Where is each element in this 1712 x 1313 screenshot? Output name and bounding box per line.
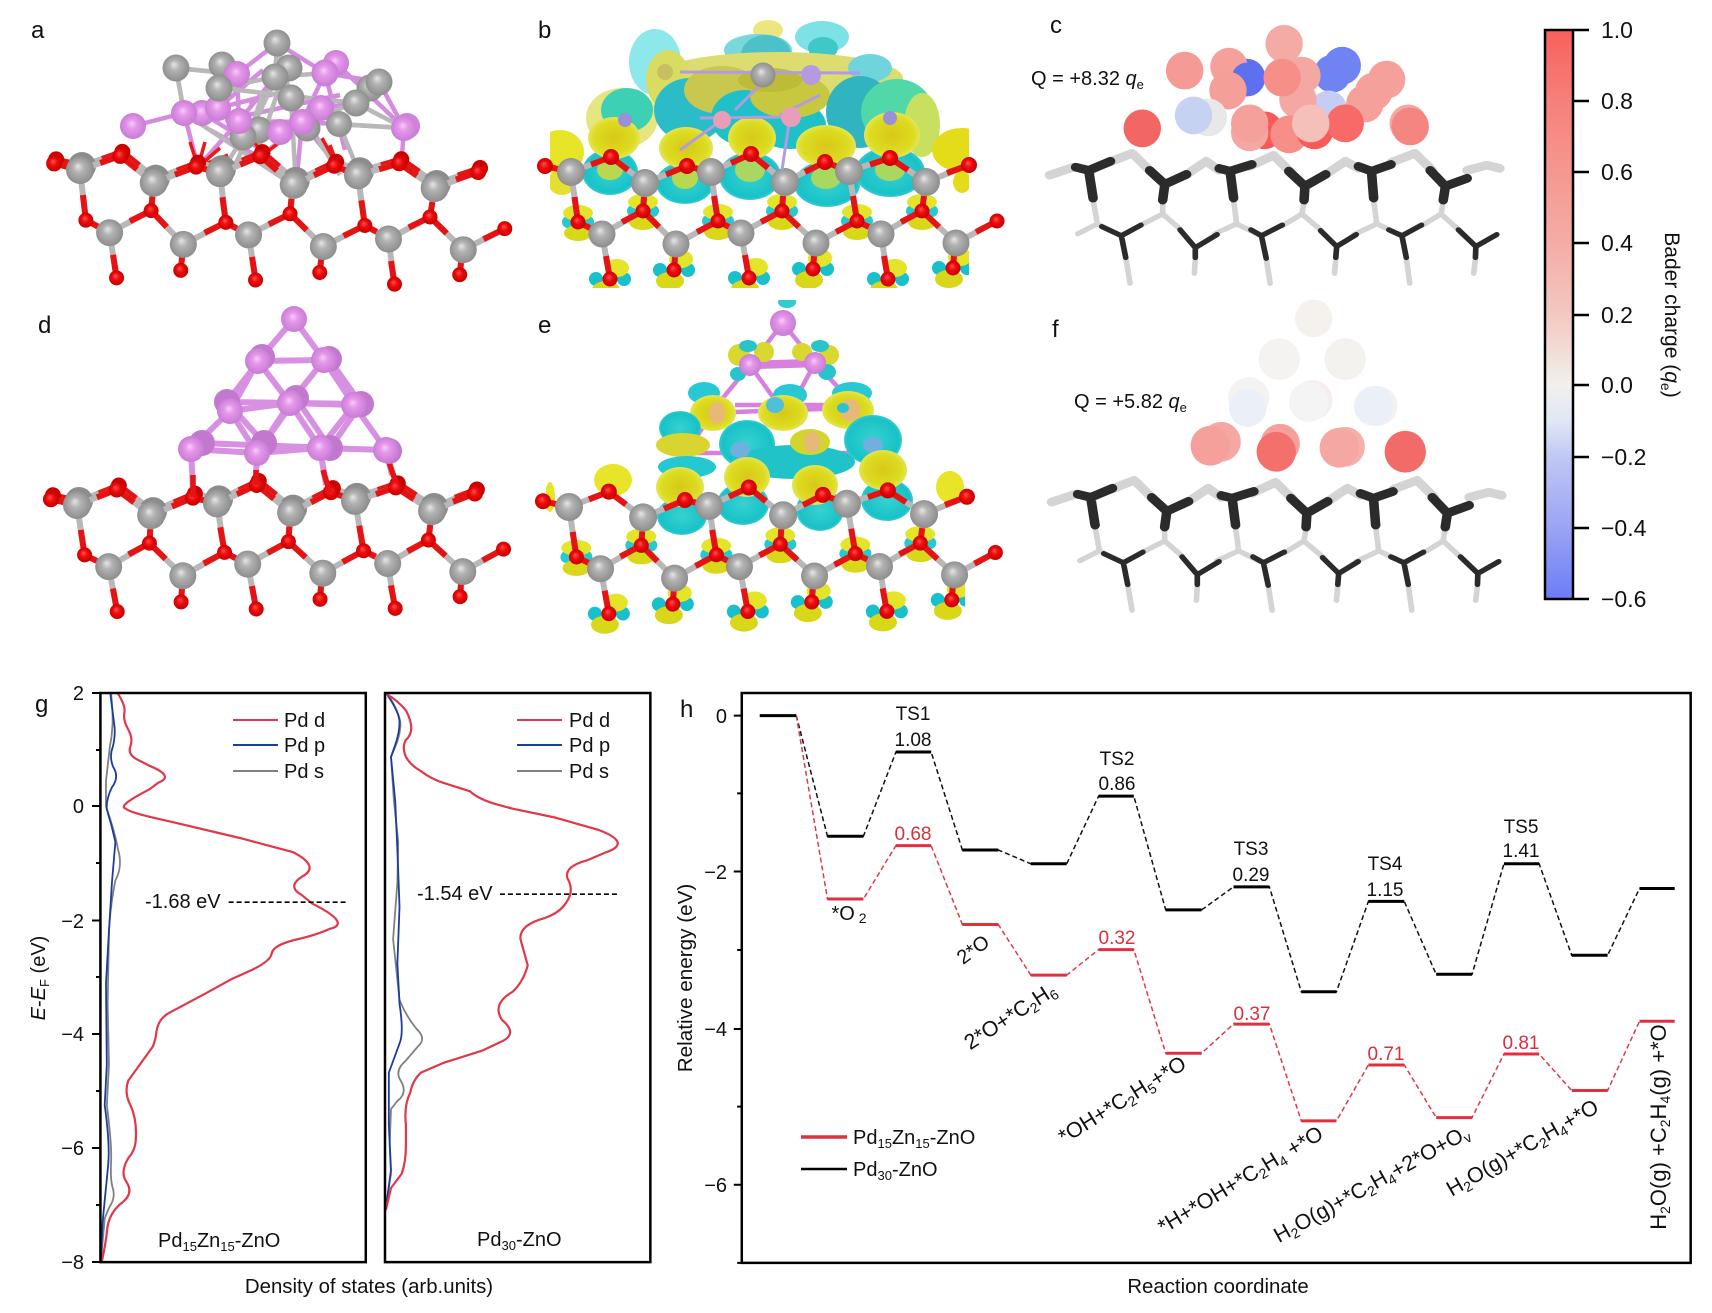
legend left: Pd p xyxy=(284,735,325,757)
label f: f xyxy=(1052,316,1059,343)
y axis tick labels: −4 xyxy=(704,1019,727,1041)
legend xyxy=(801,1127,975,1183)
intermediate labels: +*O xyxy=(1278,1121,1327,1164)
DOS plot right xyxy=(385,693,650,1262)
Pd15Zn15 dashed path xyxy=(796,716,1640,1121)
cluster bonds xyxy=(133,43,404,187)
y axis tick labels: −2 xyxy=(704,862,727,884)
colour bar labels: 0.2 xyxy=(1601,302,1633,328)
transition state labels: TS5 xyxy=(1504,817,1538,838)
colour bar labels: 0.0 xyxy=(1601,372,1633,398)
colour bar labels: 0.4 xyxy=(1601,230,1633,256)
Pd-O red bonds xyxy=(193,462,396,497)
intermediate labels: 4 xyxy=(1276,1152,1291,1170)
slab wireframe xyxy=(1050,153,1500,283)
intermediate labels: (g) +*O xyxy=(1646,1024,1671,1096)
intermediate labels: 4 xyxy=(1385,1170,1400,1188)
intermediate labels: 2 xyxy=(1027,999,1042,1016)
transition state labels: 1.15 xyxy=(1367,880,1403,901)
y axis tick labels: −6 xyxy=(61,1138,84,1160)
intermediate labels: H xyxy=(1028,982,1054,1010)
slab ZnO back row xyxy=(45,470,485,526)
y axis title: E-E xyxy=(28,987,50,1020)
intermediate labels: H xyxy=(1366,1166,1392,1194)
legend right: Pd p xyxy=(569,735,610,757)
legend: -ZnO xyxy=(930,1127,975,1149)
y axis ticks xyxy=(92,693,101,1262)
catalyst label left: 15 xyxy=(220,1239,235,1254)
colour bar title: Bader charge ( q xyxy=(1660,232,1683,383)
red barrier values: 0.81 xyxy=(1503,1033,1539,1054)
intermediate labels: 2*O xyxy=(953,931,994,969)
panel a: Pd15Zn15 on ZnO structure xyxy=(31,17,514,294)
intermediate labels: *H+*OH+*C xyxy=(1154,1160,1263,1239)
charge annotation: e xyxy=(1180,400,1187,415)
charge-coloured atoms xyxy=(1124,25,1429,153)
panel e: charge density difference of Pd30 xyxy=(535,296,1003,634)
label g: g xyxy=(35,691,48,718)
label e: e xyxy=(538,312,551,339)
charge-coloured atoms xyxy=(1191,299,1426,473)
x axis title: Reaction coordinate xyxy=(1127,1276,1309,1298)
colour bar labels: 0.6 xyxy=(1601,159,1633,185)
slab ZnO xyxy=(535,477,1003,622)
intermediate labels: 5 xyxy=(1145,1080,1160,1097)
charge annotation: Q = +5.82 q xyxy=(1074,391,1180,413)
legend right: Pd d xyxy=(569,710,610,732)
Pd d curve xyxy=(386,694,618,1210)
intermediate labels: 2 xyxy=(1657,1119,1673,1127)
legend right: Pd s xyxy=(569,761,609,783)
cluster pink atoms xyxy=(739,310,826,376)
frame xyxy=(385,693,650,1262)
Pd30 energy levels xyxy=(760,716,1675,992)
y axis tick labels: −8 xyxy=(61,1252,84,1274)
panel g: density of states xyxy=(28,683,650,1298)
transition state labels xyxy=(895,704,1539,901)
colour bar title: e xyxy=(1658,383,1674,391)
red barrier values: 0.71 xyxy=(1368,1044,1404,1065)
transition state labels: 0.86 xyxy=(1099,774,1135,795)
DOS plot left xyxy=(100,693,366,1262)
intermediate labels: O(g) +C xyxy=(1646,1127,1671,1206)
colour bar labels: −0.6 xyxy=(1601,586,1646,612)
frame xyxy=(100,693,366,1262)
slab ZnO back row xyxy=(47,139,488,200)
y axis title: F xyxy=(37,979,52,987)
isosurfaces xyxy=(550,20,969,288)
intermediate labels: 2 xyxy=(1536,1134,1551,1152)
intermediate labels: 4 xyxy=(1657,1096,1673,1104)
y axis tick labels: 2 xyxy=(73,683,84,705)
intermediate labels: +*O xyxy=(1146,1051,1190,1092)
y axis title: Relative energy (eV) xyxy=(674,884,697,1072)
catalyst label left: -ZnO xyxy=(235,1230,280,1252)
axis ticks xyxy=(734,716,742,1263)
dashed reference xyxy=(229,901,346,903)
cluster pink back atoms xyxy=(189,50,420,145)
charge annotation: Q = +8.32 q xyxy=(1031,68,1137,90)
cluster front atoms xyxy=(120,30,417,141)
intermediate labels: 2 xyxy=(1657,1206,1673,1214)
intermediate labels: +*O xyxy=(1558,1095,1603,1134)
slab wireframe xyxy=(1052,480,1502,610)
intermediate labels: H xyxy=(1442,1173,1468,1201)
red barrier values: 0.68 xyxy=(895,824,931,845)
Pd15Zn15 energy levels xyxy=(827,846,1675,1121)
Pd s curve xyxy=(386,694,422,1206)
legend: 30 xyxy=(877,1168,892,1183)
cluster bonds xyxy=(191,319,392,490)
y axis tick labels: −6 xyxy=(704,1175,727,1197)
colour bar labels: −0.4 xyxy=(1601,515,1647,541)
Pd p curve xyxy=(387,694,402,1202)
intermediate labels: H xyxy=(1126,1075,1152,1104)
y axis tick labels: 0 xyxy=(73,796,84,818)
legend left: Pd s xyxy=(284,761,324,783)
intermediate labels: 2 xyxy=(1364,1182,1379,1200)
Pd s curve xyxy=(101,693,120,1262)
lower oxygen lobes xyxy=(562,194,969,288)
y axis tick labels xyxy=(61,683,84,1274)
slab ZnO xyxy=(43,474,512,620)
x axis title: Density of states (arb.units) xyxy=(245,1276,493,1298)
colour bar ticks xyxy=(1574,30,1589,599)
transition state labels: 1.08 xyxy=(895,730,931,751)
legend left xyxy=(233,710,325,783)
oxygen red fans xyxy=(190,135,338,175)
label d: d xyxy=(38,312,51,339)
cluster bonds xyxy=(690,323,860,453)
legend: Zn xyxy=(892,1127,915,1149)
intermediate labels: *OH+*C xyxy=(1054,1088,1132,1149)
label b: b xyxy=(538,17,551,44)
colour bar labels: 0.8 xyxy=(1601,88,1633,114)
panel b: charge density difference of Pd15Zn15 xyxy=(536,17,1004,299)
catalyst label right: Pd xyxy=(477,1229,501,1251)
cluster atoms xyxy=(178,306,402,466)
slab ZnO xyxy=(43,143,514,294)
dashed reference xyxy=(500,893,620,895)
intermediate labels: 2*O+*C xyxy=(960,995,1034,1055)
transition state labels: TS3 xyxy=(1234,839,1268,860)
transition state labels: TS4 xyxy=(1368,854,1403,875)
transition state labels: TS2 xyxy=(1100,749,1134,770)
d-band centre label right: -1.54 eV xyxy=(417,883,493,905)
slab ZnO xyxy=(537,146,1004,286)
catalyst label left: Pd xyxy=(158,1230,182,1252)
label c: c xyxy=(1050,12,1062,39)
transition state labels: TS1 xyxy=(896,704,930,725)
intermediate labels: 4 xyxy=(1556,1122,1571,1140)
label h: h xyxy=(680,696,693,723)
colour bar labels: 1.0 xyxy=(1601,17,1633,43)
legend: 15 xyxy=(877,1136,892,1151)
intermediate labels: O(g)+*C xyxy=(1290,1177,1371,1236)
colour bar labels: −0.2 xyxy=(1601,444,1646,470)
charge annotation: e xyxy=(1137,77,1144,92)
label a: a xyxy=(31,17,45,44)
panel h: reaction energy profile xyxy=(674,693,1691,1298)
panel d: Pd30 on ZnO structure xyxy=(38,306,512,620)
catalyst label left: Zn xyxy=(197,1230,220,1252)
Pd30 dashed path xyxy=(796,716,1640,992)
Pd p curve xyxy=(101,693,116,1262)
y axis tick labels: −4 xyxy=(61,1024,84,1046)
colour bar title: ) xyxy=(1660,391,1683,398)
legend: -ZnO xyxy=(892,1159,938,1181)
intermediate labels: 6 xyxy=(1046,986,1062,1004)
legend: 15 xyxy=(915,1136,930,1151)
y axis title: (eV) xyxy=(28,936,50,979)
panel f: Bader charge map of Pd30 xyxy=(1052,299,1502,610)
y axis tick labels: −2 xyxy=(61,911,84,933)
d-band centre label left: -1.68 eV xyxy=(145,891,221,913)
legend: Pd xyxy=(853,1127,877,1149)
energy diagram xyxy=(734,693,1691,1263)
catalyst label left: 15 xyxy=(182,1239,197,1254)
intermediate labels: 2 xyxy=(1125,1092,1140,1110)
intermediate labels: 2 xyxy=(1256,1164,1271,1182)
catalyst label right: 30 xyxy=(501,1238,516,1253)
embedded cluster atoms xyxy=(618,62,897,170)
intermediate labels: 2 xyxy=(1288,1224,1303,1242)
transition state labels: 0.29 xyxy=(1233,865,1269,886)
red barrier values: 0.32 xyxy=(1099,928,1135,949)
intermediate labels: H xyxy=(1258,1148,1283,1176)
intermediate labels: H xyxy=(1646,1104,1671,1119)
intermediate labels: 2 xyxy=(1461,1177,1476,1195)
y axis tick labels xyxy=(704,706,727,1197)
intermediate labels: H xyxy=(1270,1219,1295,1248)
cluster back atoms xyxy=(208,52,384,150)
intermediate labels: H xyxy=(1538,1117,1563,1146)
intermediate labels: H xyxy=(1646,1214,1671,1230)
transition state labels: 1.41 xyxy=(1503,841,1539,862)
legend left: Pd d xyxy=(284,710,325,732)
red barrier values: 0.37 xyxy=(1234,1004,1270,1025)
intermediate labels: O(g)+*C xyxy=(1462,1129,1543,1190)
intermediate labels: +2*O+O xyxy=(1387,1123,1467,1183)
panel c: Bader charge map of Pd15Zn15 xyxy=(1031,12,1500,283)
intermediate labels: 2 xyxy=(855,910,867,926)
y axis tick labels: 0 xyxy=(716,706,727,728)
legend right xyxy=(517,710,610,783)
intermediate labels: *O xyxy=(831,903,855,925)
intermediate labels: v xyxy=(1461,1129,1475,1146)
intermediate labels xyxy=(831,903,1673,1249)
colour bar labels xyxy=(1601,17,1647,612)
isosurfaces xyxy=(545,296,973,634)
frame xyxy=(742,693,1691,1263)
Pd d curve xyxy=(102,693,338,1262)
legend: Pd xyxy=(853,1159,877,1181)
catalyst label right: -ZnO xyxy=(516,1229,562,1251)
colour bar xyxy=(1545,17,1683,612)
red barrier values xyxy=(895,824,1539,1065)
